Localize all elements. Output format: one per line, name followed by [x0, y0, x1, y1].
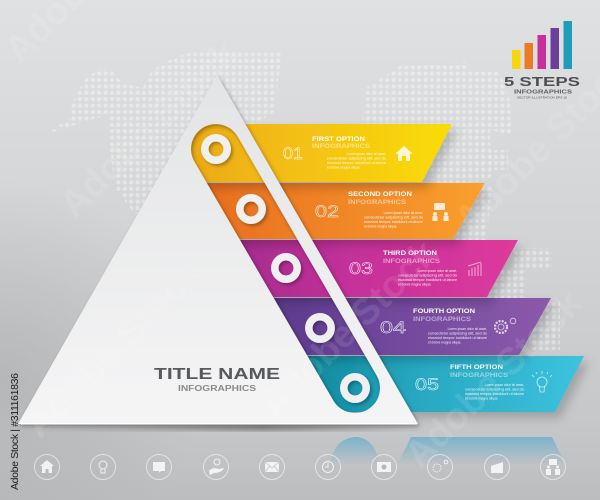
watermark: Adobe Stock [397, 282, 591, 476]
title: TITLE NAME [154, 366, 280, 383]
band 4 text: INFOGRAPHICS [413, 317, 471, 323]
band 4 text: eiusmod tempor incididunt ut labore [428, 336, 487, 340]
icon: people with speech box [432, 203, 448, 221]
band 1 text: consectetur adipiscing elit, sed do [327, 156, 386, 160]
band 3: third option [230, 240, 518, 297]
band 2 text: 02 [315, 202, 339, 221]
band 2 text: SECOND OPTION [348, 192, 412, 198]
band 2 text: INFOGRAPHICS [348, 200, 406, 206]
band 5 text: eiusmod tempor incididunt ut labore [465, 392, 524, 396]
icon: speech bubble [146, 454, 172, 480]
logo text: 5 STEPS [504, 74, 580, 89]
base shadow of pyramid [25, 424, 420, 431]
icon: envelope [260, 454, 284, 480]
band 3 text: THIRD OPTION [383, 251, 437, 257]
band 5 text: consectetur adipiscing elit, sed do [465, 388, 524, 392]
pyramid with capsule cut-out [18, 75, 418, 424]
icon: home [34, 454, 60, 480]
reflection: cyan band [397, 437, 566, 465]
pyramid base highlight [21, 423, 417, 424]
band 3 text: et dolore magna aliqua. [398, 282, 431, 286]
icon: gears [495, 318, 516, 333]
icon: hand with coin [204, 454, 228, 480]
band 1 text [283, 137, 386, 170]
watermark: Adobe Stock [17, 252, 211, 446]
reflection: rounded end of capsule [330, 437, 379, 465]
band 3 text: Lorem ipsum dolor sit amet, [418, 269, 457, 273]
band 5 text: INFOGRAPHICS [450, 373, 508, 379]
icon: people chart [540, 454, 566, 480]
icon: gears [428, 454, 452, 480]
side credit: Adobe Stock | #311161836 [9, 373, 21, 490]
bottom icon row [34, 454, 566, 480]
band 4 text: et dolore magna aliqua. [428, 340, 461, 344]
band 1 text: INFOGRAPHICS [312, 144, 370, 150]
band 3 text: consectetur adipiscing elit, sed do [398, 274, 457, 278]
band 3 text: eiusmod tempor incididunt ut labore [398, 278, 457, 282]
band 5 text: 05 [415, 375, 439, 394]
band 2 text: Lorem ipsum dolor sit amet, [384, 211, 423, 215]
logo text: VECTOR ILLUSTRATION EPS 10 [517, 96, 568, 100]
band 3 text: 03 [349, 259, 373, 278]
band 2 text: et dolore magna aliqua. [364, 224, 397, 228]
band 4 text: 04 [380, 318, 406, 337]
band 2 text [315, 192, 423, 228]
band 5 text: et dolore magna aliqua. [465, 396, 498, 400]
watermark: Adobe Stock [52, 32, 246, 226]
logo: 5 steps bars [504, 21, 580, 100]
band 1 text: FIRST OPTION [312, 137, 365, 143]
band 1 text: 01 [283, 144, 303, 163]
icon: house [396, 146, 412, 161]
band 1 text: et dolore magna aliqua. [327, 166, 360, 170]
logo text [504, 74, 580, 100]
band 5 text: FIFTH OPTION [450, 365, 503, 371]
logo text: INFOGRAPHICS [514, 90, 572, 96]
icon: light bulb [532, 371, 552, 392]
band 2: second option [200, 183, 485, 239]
icon: clock [316, 454, 340, 480]
band 4 text: consectetur adipiscing elit, sed do [428, 332, 487, 336]
band 1 text: eiusmod tempor incididunt ut labore [327, 161, 386, 165]
band 4 text [380, 309, 487, 344]
ring markers [205, 138, 366, 399]
icon: growth bars [484, 454, 510, 480]
band 3 text [349, 251, 457, 286]
band 5 text [415, 365, 524, 400]
icon: banknote [372, 454, 396, 480]
band 4 text: Lorem ipsum dolor sit amet, [448, 327, 487, 331]
icon: rising bars [468, 262, 481, 276]
band 5 text: Lorem ipsum dolor sit amet, [485, 383, 524, 387]
title [154, 366, 280, 393]
band 4: fourth option [260, 298, 551, 355]
icon: bulb [90, 454, 116, 480]
title: INFOGRAPHICS [178, 384, 257, 393]
band 1 text: Lorem ipsum dolor sit amet, [347, 152, 386, 156]
world map of dots [50, 50, 560, 350]
band 1: first option [190, 124, 452, 182]
band 3 text: INFOGRAPHICS [383, 259, 440, 265]
band 2 text: consectetur adipiscing elit, sed do [364, 216, 423, 220]
band 2 text: eiusmod tempor incididunt ut labore [364, 220, 423, 224]
watermark: Adobe Stock [252, 232, 446, 426]
band 5: fifth option [300, 356, 584, 412]
band 4 text: FOURTH OPTION [413, 309, 475, 315]
